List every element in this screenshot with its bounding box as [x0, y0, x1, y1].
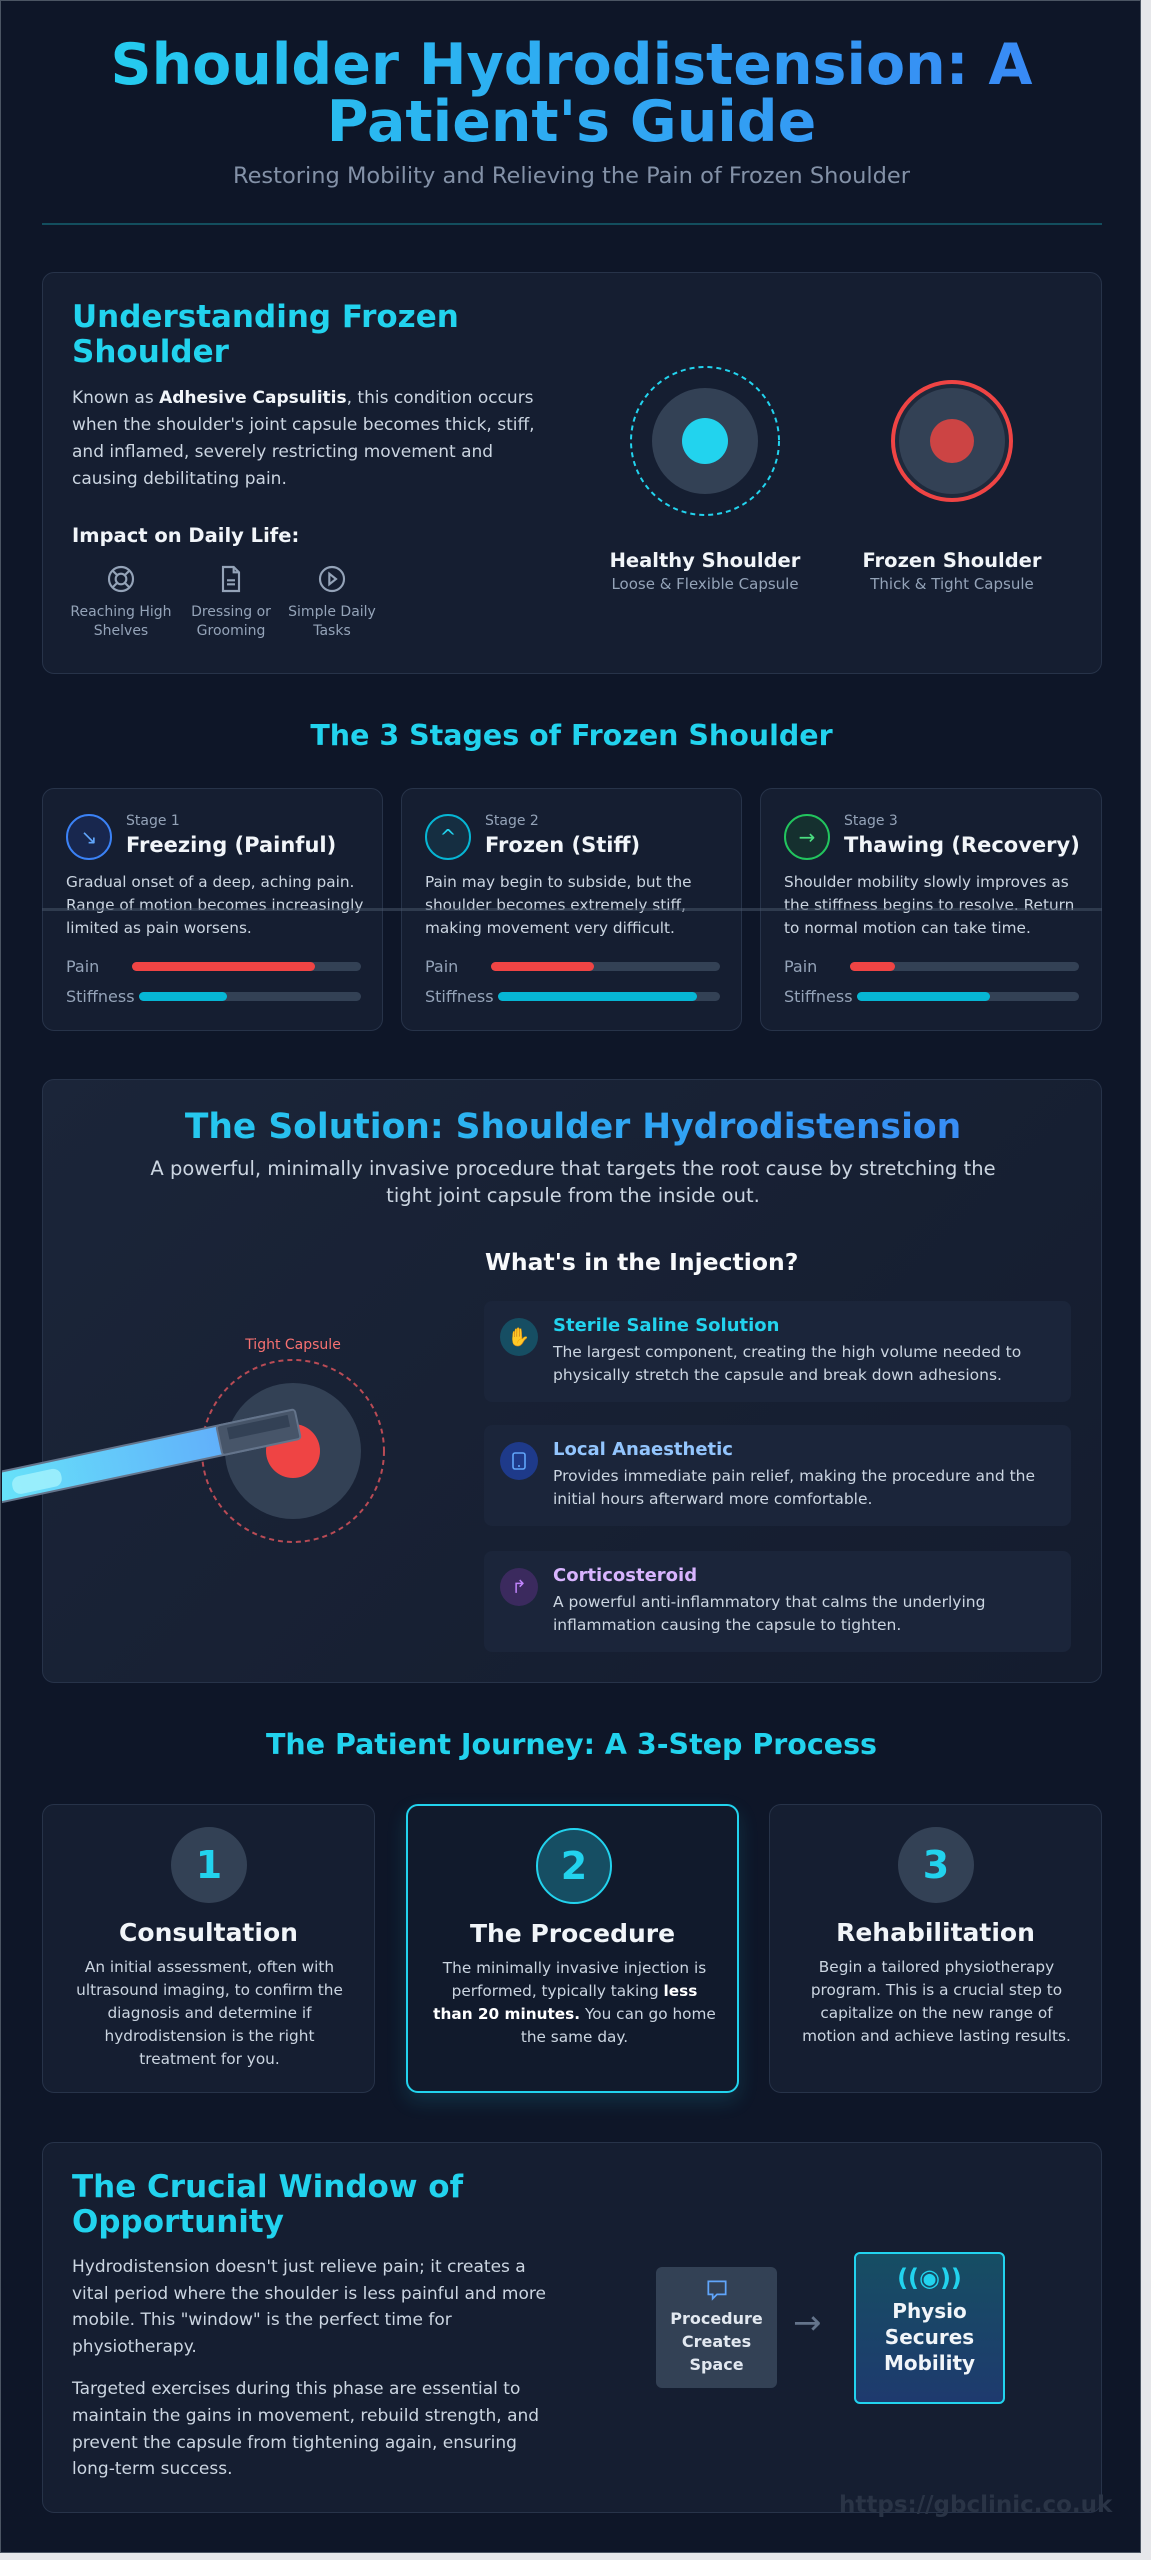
step 3: Begin a tailored physiotherapy program. This is a crucial step to capitalize on the new range of motion and achieve lasting results.: [802, 1958, 1071, 2045]
heading: Understanding Frozen: [72, 299, 459, 335]
icon: trend down: ↘: [81, 825, 97, 849]
stage 3 card: [760, 788, 1102, 1031]
impact heading: Impact on Daily Life:: [72, 524, 299, 547]
text block: Known as Adhesive Capsulitis, this condition occurs when the shoulder's joint capsule becomes thick, stiff, and inflamed, severely restricting movement and causing debilitating pain.: [72, 388, 535, 489]
injection item: corticosteroid: ↱: [511, 1576, 527, 1598]
injection item: corticosteroid: A powerful anti-inflammatory that calms the underlying inflammation causing the capsule to tighten.: [553, 1593, 985, 1634]
description: A powerful, minimally invasive procedure that targets the root cause by stretching the tight joint capsule from the inside out.: [150, 1157, 996, 1207]
stage 2 card: Pain may begin to subside, but the shoulder becomes extremely stiff, making movement very difficult.: [425, 873, 692, 937]
heading: The Solution: Shoulder Hydrodistension: [185, 1107, 961, 1147]
injection item: anaesthetic: Local Anaesthetic: [553, 1439, 733, 1460]
box: procedure creates space: Procedure: [670, 2309, 763, 2328]
icon: reaching: [70, 566, 172, 639]
box: physio secures mobility: Physio: [892, 2299, 967, 2323]
diagram: frozen shoulder: Thick & Tight Capsule: [870, 575, 1034, 593]
icon: arrow right: →: [799, 825, 815, 849]
icon: tasks: Simple Daily: [288, 604, 376, 620]
step 1: 1: [196, 1843, 222, 1887]
stage 2 card: Stiffness: [425, 987, 494, 1006]
step 2: 2: [561, 1844, 587, 1888]
panel: solution: [42, 1079, 1102, 1683]
heading: Opportunity: [72, 2204, 284, 2240]
step 3: 3: [923, 1843, 949, 1887]
injection item: saline: The largest component, creating the high volume needed to physically stretch the capsule and break down adhesions.: [553, 1343, 1021, 1384]
heading: The Crucial Window of: [72, 2169, 463, 2205]
icon: reaching: Shelves: [94, 623, 148, 639]
step 1: An initial assessment, often with ultrasound imaging, to confirm the diagnosis and determine if hydrodistension is the right treatment for you.: [76, 1958, 343, 2068]
box: physio secures mobility: Mobility: [884, 2351, 975, 2375]
text block: Hydrodistension doesn't just relieve pain; it creates a vital period where the shoulder is less painful and more mobile. This "window" is the perfect time for physiotherapy.: [72, 2257, 546, 2357]
box: procedure creates space: Creates: [682, 2332, 751, 2351]
subtitle: Restoring Mobility and Relieving the Pain of Frozen Shoulder: [233, 163, 910, 189]
stage 3 card: Shoulder mobility slowly improves as the stiffness begins to resolve. Return to normal motion can take time.: [784, 873, 1074, 937]
stage 2 card: Pain: [425, 957, 458, 976]
step 2: The minimally invasive injection is performed, typically taking less than 20 minutes. You can go home the same day.: [433, 1959, 716, 2046]
heading: 3 stages: The 3 Stages of Frozen Shoulder: [310, 719, 833, 752]
step 1: [42, 1804, 375, 2093]
stage 1 card: Stiffness: [66, 987, 135, 1006]
stage 3 card: Stiffness: [784, 987, 853, 1006]
stage 2 card: Frozen (Stiff): [485, 833, 640, 857]
stage 1 card: Pain: [66, 957, 99, 976]
stage 2 card: [401, 788, 742, 1031]
stage 3 card: Stage 3: [844, 813, 898, 829]
title: [1, 37, 1142, 151]
step 3: [769, 1804, 1102, 2093]
heading: Shoulder: [72, 334, 229, 370]
icon: dressing: [191, 566, 271, 639]
icon: dressing: Dressing or: [191, 604, 271, 620]
stage 2 card: Stage 2: [485, 813, 539, 829]
box: procedure creates space: Space: [689, 2355, 744, 2374]
icon: reaching: Reaching High: [70, 604, 172, 620]
icon: chevron up: [425, 814, 471, 860]
injection item: corticosteroid: Corticosteroid: [553, 1565, 697, 1586]
injection item: anaesthetic: Provides immediate pain relief, making the procedure and the initial hours afterward more comfortable.: [553, 1467, 1035, 1508]
diagram: healthy shoulder: [610, 366, 800, 593]
box: procedure creates space: [656, 2267, 777, 2388]
stage 1 card: Stage 1: [126, 813, 180, 829]
stage 1 card: Freezing (Painful): [126, 833, 336, 857]
heading: [72, 2169, 464, 2240]
heading: injection: What's in the Injection?: [485, 1248, 798, 1276]
stage 3 card: Pain: [784, 957, 817, 976]
step 1: Consultation: [119, 1918, 298, 1947]
stage 1 card: [42, 788, 383, 1031]
box: physio secures mobility: [854, 2252, 1005, 2404]
injection item: saline: [484, 1301, 1071, 1402]
panel: stages: [42, 788, 1102, 1031]
panel: understanding frozen shoulder: [42, 272, 1102, 674]
watermark: https://gbclinic.co.uk: [839, 2492, 1112, 2518]
box: physio secures mobility: ((◉)): [897, 2264, 962, 2292]
icon: tasks: [288, 566, 376, 639]
title: Shoulder Hydrodistension: A: [111, 32, 1032, 98]
step 2: [406, 1804, 739, 2093]
arrow: →: [793, 2303, 822, 2343]
text block: Targeted exercises during this phase are essential to maintain the gains in movement, rebuild strength, and prevent the capsule from tightening again, ensuring long-term success.: [72, 2379, 539, 2479]
stage 3 card: Thawing (Recovery): [844, 833, 1080, 857]
injection item: saline: Sterile Saline Solution: [553, 1315, 779, 1336]
diagram: frozen shoulder: Frozen Shoulder: [862, 549, 1042, 572]
panel: window of opportunity: [42, 2142, 1102, 2513]
icons: daily life: [70, 566, 376, 639]
diagram: healthy shoulder: Healthy Shoulder: [610, 549, 800, 572]
heading: [72, 299, 459, 370]
diagram: frozen shoulder: [862, 380, 1042, 593]
stage 1 card: Gradual onset of a deep, aching pain. Range of motion becomes increasingly limited as pain worsens.: [66, 873, 363, 937]
text block: [72, 2257, 546, 2479]
icon: tasks: Tasks: [313, 623, 351, 639]
step 3: Rehabilitation: [836, 1918, 1035, 1947]
injection item: anaesthetic: [484, 1425, 1071, 1526]
icon: arrow right: [784, 814, 830, 860]
heading: patient journey: The Patient Journey: A 3-Step Process: [266, 1728, 877, 1761]
diagram: syringe into capsule: [2, 1337, 385, 1543]
injection item: corticosteroid: [484, 1551, 1071, 1652]
icon: chevron up: ^: [440, 825, 456, 849]
diagram: syringe into capsule: Tight Capsule: [245, 1337, 341, 1353]
box: physio secures mobility: Secures: [885, 2325, 974, 2349]
icon: dressing: Grooming: [197, 623, 265, 639]
injection item: saline: ✋: [508, 1326, 530, 1348]
step 2: The Procedure: [470, 1919, 675, 1948]
icon: trend down: [66, 814, 112, 860]
diagram: healthy shoulder: Loose & Flexible Capsule: [611, 575, 799, 593]
title: Patient's Guide: [327, 89, 816, 155]
